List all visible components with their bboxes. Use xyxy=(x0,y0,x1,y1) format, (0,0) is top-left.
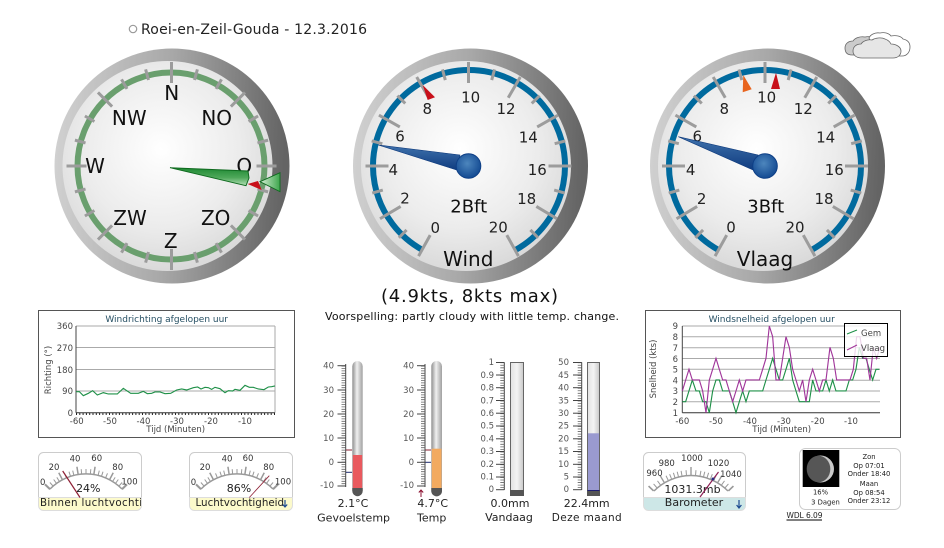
rain gauge: this month: 22.4mm xyxy=(564,497,610,510)
gauge: indoor humidity: 100 xyxy=(121,478,138,488)
chart: wind direction last hour xyxy=(38,310,294,438)
gauge: barometer: 980 xyxy=(659,459,675,469)
rain gauge: this month: 50 xyxy=(558,358,569,368)
gauge: wind speed: 20 xyxy=(489,219,508,237)
gauge: outdoor humidity: 40 xyxy=(222,454,232,464)
thermometer: temperature xyxy=(400,361,448,525)
chart: wind speed last hour: 2 xyxy=(673,398,678,408)
rain gauge: this month: 40 xyxy=(558,384,569,394)
chart: wind direction last hour: Tijd (Minuten) xyxy=(145,425,205,435)
rain gauge: today: Vandaag xyxy=(485,511,533,524)
panel: sun and moon: Op 07:01 xyxy=(853,462,885,470)
chart: wind speed last hour: -30 xyxy=(777,417,791,427)
chart: wind speed last hour: 4 xyxy=(673,376,678,386)
rain gauge: today: 0 xyxy=(489,485,494,495)
gauge: wind speed: 2Bft xyxy=(450,197,487,218)
gauge: outdoor humidity: Luchtvochtigheid xyxy=(196,497,284,509)
gauge: gust speed: 2 xyxy=(697,190,706,208)
gauge: barometer: Barometer xyxy=(665,496,724,509)
chart: wind direction last hour: -60 xyxy=(70,417,84,427)
gauge: gust speed: 12 xyxy=(794,100,813,118)
gauge: gust speed: 14 xyxy=(816,128,835,146)
wind summary: (4.9kts, 8kts max) xyxy=(381,286,558,307)
chart: wind speed last hour: 1 xyxy=(673,409,678,419)
gauge: outdoor humidity: 86% xyxy=(227,482,251,495)
chart: wind speed last hour: Windsnelheid afgelopen uur xyxy=(709,315,835,325)
chart: wind speed last hour: 6 xyxy=(673,355,678,365)
gauge: indoor humidity: Binnen luchtvochtigheid xyxy=(40,497,173,509)
gauge: barometer: 960 xyxy=(646,469,663,479)
rain gauge: today: 0.4 xyxy=(480,434,494,444)
thermometer: feels-like temperature: Gevoelstemp xyxy=(317,512,390,525)
gauge: wind speed: 18 xyxy=(517,190,536,208)
gauge: wind speed: 16 xyxy=(528,161,547,179)
panel: sun and moon: Onder 18:40 xyxy=(848,470,890,478)
chart: wind speed last hour: -60 xyxy=(675,417,689,427)
gauge: wind speed: 14 xyxy=(519,129,538,147)
gauge: wind speed: 2 xyxy=(400,190,410,208)
rain gauge: today: 0.6 xyxy=(480,409,494,419)
rain gauge: this month: Deze maand xyxy=(552,512,622,524)
chart: wind direction last hour: 360 xyxy=(57,322,73,332)
chart: wind speed last hour: 7 xyxy=(673,344,678,354)
chart: wind speed last hour: -10 xyxy=(844,417,858,427)
gauge: outdoor humidity: 20 xyxy=(200,463,210,473)
chart: wind speed last hour: 9 xyxy=(673,322,678,332)
gauge: barometer xyxy=(644,452,746,510)
gauge: wind speed: 4 xyxy=(389,161,398,179)
gauge: outdoor humidity: 100 xyxy=(275,478,291,488)
gauge: gust speed: 3Bft xyxy=(747,197,784,218)
thermometer: feels-like temperature: 10 xyxy=(323,434,334,444)
panel: sun and moon: 16% xyxy=(813,488,829,496)
gauge: indoor humidity: 80 xyxy=(112,463,123,473)
gauge: outdoor humidity: 60 xyxy=(243,454,253,464)
thermometer: temperature: 0 xyxy=(409,458,414,468)
panel: sun and moon: Zon xyxy=(862,453,876,461)
rain gauge: today: 0.8 xyxy=(480,384,494,394)
chart: wind direction last hour: -20 xyxy=(204,417,218,427)
rain gauge: this month: 5 xyxy=(564,472,569,482)
rain gauge: today: 0.7 xyxy=(480,396,494,406)
thermometer: temperature: -10 xyxy=(400,481,414,491)
gauge: wind speed xyxy=(353,48,588,284)
gauge: compass wind direction: W xyxy=(85,154,105,178)
chart: wind direction last hour: -30 xyxy=(170,417,184,427)
gauge: barometer: 1040 xyxy=(720,470,742,480)
panel: sun and moon: Op 08:54 xyxy=(853,489,885,497)
chart: wind speed last hour xyxy=(646,310,900,438)
title: Roei-en-Zeil-Gouda - 12.3.2016 xyxy=(141,22,367,38)
thermometer: feels-like temperature xyxy=(317,361,390,525)
rain gauge: today: 0.3 xyxy=(480,447,494,457)
chart: wind direction last hour: -10 xyxy=(238,417,252,427)
gauge: wind speed: 10 xyxy=(461,89,480,107)
chart: wind speed last hour: Vlaag xyxy=(861,344,885,354)
thermometer: temperature: Temp xyxy=(416,512,446,525)
chart: wind direction last hour: 90 xyxy=(62,387,73,397)
gauge: gust speed: 20 xyxy=(785,219,805,237)
thermometer: temperature: 20 xyxy=(403,410,414,420)
panel: sun and moon: Maan xyxy=(860,480,878,488)
gauge: wind speed: 0 xyxy=(431,219,440,237)
gauge: gust speed: Vlaag xyxy=(737,247,793,271)
thermometer: feels-like temperature: 2.1°C xyxy=(338,497,369,510)
version link: WDL 6.09 xyxy=(786,511,823,520)
rain gauge: today: 0.5 xyxy=(480,422,494,432)
chart: wind speed last hour: 3 xyxy=(673,387,678,397)
thermometer: feels-like temperature: -10 xyxy=(320,481,334,491)
thermometer: feels-like temperature: 0 xyxy=(329,458,334,468)
gauge: compass wind direction: NO xyxy=(201,106,232,130)
rain gauge: this month: 30 xyxy=(558,409,569,419)
panel: sun and moon: Onder 23:12 xyxy=(848,497,890,505)
chart: wind direction last hour: 0 xyxy=(68,409,73,419)
rain gauge: this month: 20 xyxy=(558,434,569,444)
gauge: compass wind direction: N xyxy=(164,81,179,105)
thermometer: feels-like temperature: 40 xyxy=(323,362,334,372)
thermometer: temperature: 10 xyxy=(403,434,414,444)
gauge: indoor humidity: 40 xyxy=(70,454,80,464)
gauge: gust speed: 8 xyxy=(720,100,729,118)
gauge: compass wind direction: NW xyxy=(112,106,147,130)
gauge: compass wind direction xyxy=(54,48,290,284)
chart: wind direction last hour: Windrichting afgelopen uur xyxy=(105,315,228,325)
chart: wind speed last hour: 8 xyxy=(673,333,678,343)
rain gauge: today: 0.9 xyxy=(480,371,494,381)
gauge: compass wind direction: O xyxy=(236,154,252,178)
gauge: wind speed: Wind xyxy=(443,247,493,271)
chart: wind direction last hour: 180 xyxy=(57,366,73,376)
panel: sun and moon xyxy=(800,448,900,510)
gauge: wind speed: 12 xyxy=(496,100,516,118)
thermometer: temperature: 4.7°C xyxy=(417,497,448,510)
forecast text: Voorspelling: partly cloudy with little temp. change. xyxy=(325,310,619,323)
rain gauge: today: 0.2 xyxy=(480,460,494,470)
rain gauge: today xyxy=(480,358,533,524)
gauge: compass wind direction: ZO xyxy=(201,206,230,230)
gauge: compass wind direction: Z xyxy=(164,229,178,253)
rain gauge: today: 1 xyxy=(489,358,494,368)
gauge: gust speed: 6 xyxy=(693,128,702,146)
gauge: barometer: 1000 xyxy=(681,454,703,464)
thermometer: temperature: 40 xyxy=(403,362,414,372)
chart: wind speed last hour: Snelheid (kts) xyxy=(649,340,659,398)
gauge: gust speed: 10 xyxy=(757,89,776,107)
gauge: barometer: 1031.3mb xyxy=(664,483,721,496)
chart: wind direction last hour: 270 xyxy=(57,344,73,354)
icon: clouds xyxy=(845,33,910,58)
gauge: indoor humidity: 24% xyxy=(76,482,101,495)
gauge: gust speed: 18 xyxy=(814,190,834,208)
gauge: indoor humidity xyxy=(38,452,142,511)
chart: wind speed last hour: 5 xyxy=(673,366,678,376)
gauge: wind speed: 8 xyxy=(423,100,432,118)
gauge: outdoor humidity xyxy=(190,452,292,510)
rain gauge: this month: 15 xyxy=(558,447,569,457)
rain gauge: today: 0.0mm xyxy=(491,497,529,510)
thermometer: temperature: 30 xyxy=(403,386,414,396)
rain gauge: this month: 10 xyxy=(558,460,569,470)
chart: wind speed last hour: Tijd (Minuten) xyxy=(751,425,811,435)
gauge: indoor humidity: 20 xyxy=(49,463,59,473)
gauge: gust speed xyxy=(650,48,885,284)
rain gauge: today: 0.1 xyxy=(480,472,494,482)
chart: wind speed last hour: Gem xyxy=(861,329,881,339)
chart: wind speed last hour: -40 xyxy=(743,417,757,427)
rain gauge: this month: 25 xyxy=(558,422,569,432)
thermometer: feels-like temperature: 20 xyxy=(323,410,334,420)
rain gauge: this month: 45 xyxy=(558,371,569,381)
thermometer: feels-like temperature: 30 xyxy=(323,386,334,396)
chart: wind speed last hour: -50 xyxy=(709,417,723,427)
gauge: gust speed: 4 xyxy=(686,161,695,179)
gauge: compass wind direction: ZW xyxy=(113,206,147,230)
gauge: wind speed: 6 xyxy=(395,128,405,146)
gauge: gust speed: 16 xyxy=(825,161,844,179)
rain gauge: this month: 0 xyxy=(564,485,569,495)
gauge: outdoor humidity: 80 xyxy=(263,463,274,473)
gauge: indoor humidity: 0 xyxy=(40,478,45,488)
gauge: outdoor humidity: 0 xyxy=(191,478,196,488)
chart: wind speed last hour: -20 xyxy=(811,417,825,427)
panel: sun and moon: 3 Dagen xyxy=(811,498,840,506)
chart: wind direction last hour: -50 xyxy=(103,417,117,427)
rain gauge: this month: 35 xyxy=(558,396,569,406)
chart: wind direction last hour: Richting (°) xyxy=(44,346,54,394)
chart: wind direction last hour: -40 xyxy=(137,417,150,427)
gauge: barometer: 1020 xyxy=(708,459,729,469)
rain gauge: this month xyxy=(552,358,622,524)
gauge: indoor humidity: 60 xyxy=(91,454,102,464)
gauge: gust speed: 0 xyxy=(726,219,736,237)
